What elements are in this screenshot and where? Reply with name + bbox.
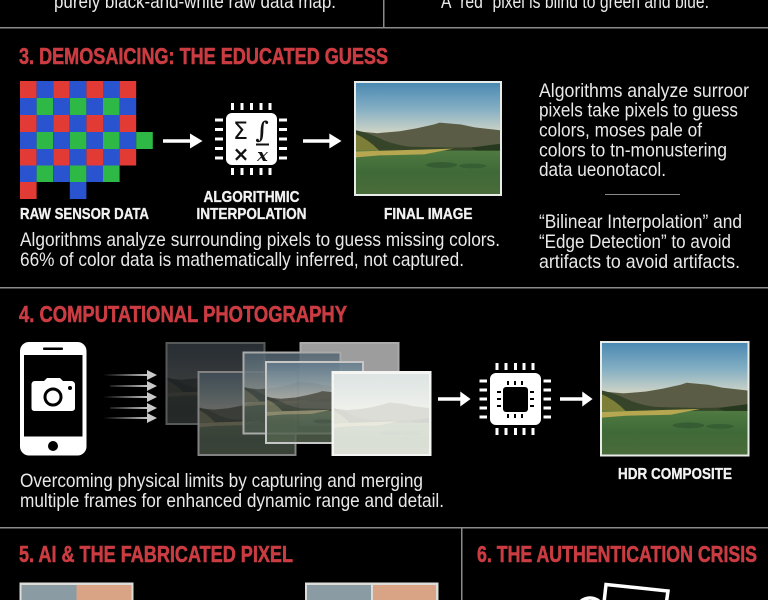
text: side note one bbox=[539, 80, 749, 181]
icon: math chip: × bbox=[233, 142, 249, 166]
text: side note two: “Edge Detection” to avoid bbox=[539, 231, 731, 253]
frame: mid exposure bbox=[244, 352, 340, 434]
image: fabricated portrait crop bbox=[305, 582, 438, 600]
image: HDR composite bbox=[600, 341, 750, 456]
text: demosaicing description: 66% of color data is mathematically inferred, not captured. bbox=[20, 249, 464, 271]
text: computational description: Overcoming physical limits by capturing and merging bbox=[20, 470, 423, 492]
image: original portrait crop bbox=[20, 582, 134, 600]
text: side note two bbox=[539, 211, 742, 273]
text: side note one: pixels take pixels to guess bbox=[539, 100, 738, 122]
heading: section 5: 5. AI & THE FABRICATED PIXEL bbox=[19, 541, 293, 567]
text: side note one: data ueonotacol. bbox=[539, 159, 666, 181]
label: raw sensor data: RAW SENSOR DATA bbox=[20, 206, 149, 223]
panel: authentication crisis bbox=[477, 541, 757, 600]
frame: darkest exposure bbox=[166, 343, 264, 424]
text: demosaicing description: Algorithms analyze surrounding pixels to guess missing colors. bbox=[20, 229, 500, 251]
text: computational description bbox=[20, 470, 444, 512]
frame: overexposed bbox=[332, 372, 430, 455]
frame: lightest back exposure bbox=[300, 343, 398, 425]
icon: math chip: Σ bbox=[233, 117, 248, 145]
arrow: stack to chip bbox=[438, 392, 471, 406]
icon: math chip: x bbox=[256, 145, 268, 166]
text: side note one: colors, moses pale of bbox=[539, 120, 703, 142]
icon: tilted photo and magnifier bbox=[576, 584, 668, 600]
heading: section 3: 3. DEMOSAICING: THE EDUCATED GUESS bbox=[19, 43, 388, 69]
arrows: capture burst bbox=[103, 370, 157, 423]
label: HDR composite: HDR COMPOSITE bbox=[618, 466, 732, 483]
text: demosaicing description bbox=[20, 229, 500, 271]
text: computational description: multiple frames for enhanced dynamic range and detail. bbox=[20, 490, 444, 512]
icon: processor chip bbox=[480, 363, 551, 435]
arrow: chip to composite bbox=[560, 392, 593, 406]
icon: math chip bbox=[215, 103, 287, 175]
frame: dark exposure bbox=[198, 372, 296, 455]
icon: smartphone with camera bbox=[20, 342, 86, 456]
image: final landscape bbox=[354, 81, 502, 196]
text: side note two: artifacts to avoid artifacts. bbox=[539, 251, 740, 273]
text: side note two: “Bilinear Interpolation” and bbox=[539, 211, 742, 233]
arrow: chip to image bbox=[303, 134, 342, 148]
arrow: mosaic to chip bbox=[163, 134, 202, 148]
label: algorithmic interpolation bbox=[196, 189, 306, 223]
icon: math chip: ∫ bbox=[255, 117, 269, 144]
panel: demosaicing bbox=[19, 43, 749, 273]
label: algorithmic interpolation: INTERPOLATION bbox=[196, 206, 306, 223]
label: final image: FINAL IMAGE bbox=[384, 206, 473, 223]
chart: Bayer sensor mosaic bbox=[20, 81, 153, 199]
text: side note one: Algorithms analyze surroor bbox=[539, 80, 749, 102]
panel: sensor text remnants bbox=[0, 0, 768, 28]
heading: section 4: 4. COMPUTATIONAL PHOTOGRAPHY bbox=[19, 301, 347, 327]
panel: computational photography bbox=[19, 301, 750, 512]
text: side note one: colors to tn-monustering bbox=[539, 140, 727, 162]
frame: normal exposure bbox=[266, 362, 363, 443]
image stack: bracketed exposures bbox=[166, 343, 430, 455]
panel: AI and the fabricated pixel bbox=[19, 541, 438, 600]
label: algorithmic interpolation: ALGORITHMIC bbox=[204, 189, 300, 206]
